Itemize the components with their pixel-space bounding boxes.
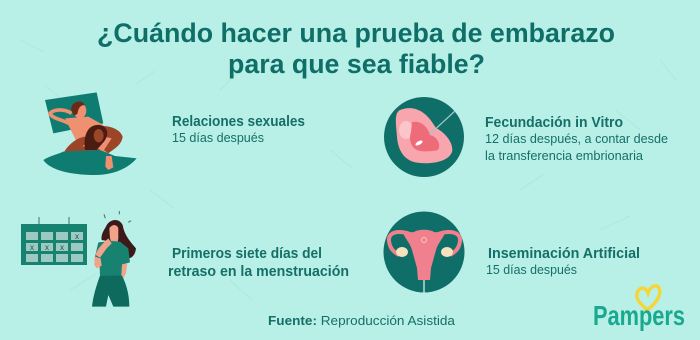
icon: calendar: x: [30, 243, 34, 252]
icon: embryo in circle: [384, 97, 464, 177]
icon: thinking woman: [92, 211, 136, 307]
logo: Pampers: [593, 286, 685, 331]
icon: calendar: x: [60, 243, 64, 252]
text: fecundación in vitro: [485, 115, 668, 163]
icon: calendar: x: [45, 243, 49, 252]
icon: calendar: [21, 217, 87, 265]
text: inseminación artificial: 15 días después: [486, 262, 577, 277]
text: primeros siete días: retraso en la menstruación: [168, 264, 349, 280]
text: fecundación in vitro: 12 días después, a contar desde: [485, 131, 668, 146]
text: fecundación in vitro: Fecundación in Vitro: [485, 115, 623, 131]
icon: uterus in circle: [384, 212, 464, 293]
text: primeros siete días: [168, 246, 349, 280]
text: relaciones sexuales: Relaciones sexuales: [172, 114, 305, 130]
title: [97, 18, 615, 79]
text: relaciones sexuales: [172, 114, 305, 145]
text: inseminación artificial: [486, 246, 640, 277]
title: ¿Cuándo hacer una prueba de embarazo: [97, 18, 615, 48]
text: fecundación in vitro: la transferencia embrionaria: [485, 148, 644, 163]
source: Fuente: Reproducción Asistida: [268, 313, 456, 328]
icon: couple in bed: [43, 92, 137, 175]
text: primeros siete días: Primeros siete días del: [172, 246, 322, 262]
icon: calendar: x: [75, 232, 79, 241]
text: relaciones sexuales: 15 días después: [172, 130, 264, 145]
text: inseminación artificial: Inseminación Artificial: [488, 246, 640, 262]
title: para que sea fiable?: [228, 49, 485, 79]
